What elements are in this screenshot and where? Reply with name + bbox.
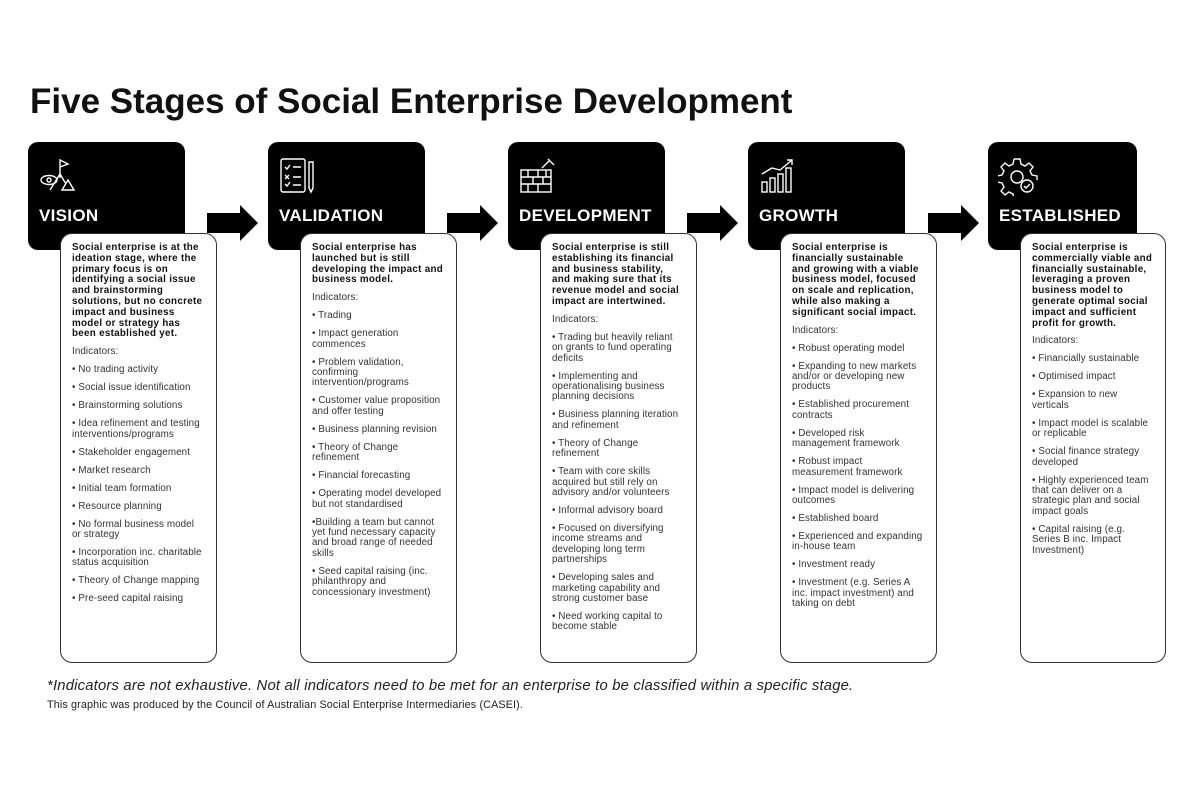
card: validation: • Financial forecasting — [312, 470, 410, 481]
card: validation: • Operating model developed but not standardised — [312, 488, 441, 510]
card: development: • Informal advisory board — [552, 505, 663, 516]
arrow 4 — [928, 205, 979, 241]
card: growth: • Impact model is delivering outcomes — [792, 485, 914, 506]
card: growth: • Experienced and expanding in-house team — [792, 531, 922, 552]
card: development: • Focused on diversifying income streams and developing long term partnerships — [552, 523, 664, 565]
card: validation: Indicators: — [312, 292, 358, 303]
card: development: • Theory of Change refinement — [552, 438, 638, 459]
card: established: • Social finance strategy developed — [1032, 446, 1139, 468]
header: established — [988, 142, 1137, 250]
card: vision: • Brainstorming solutions — [72, 400, 182, 411]
icon: brick wall — [520, 158, 554, 193]
card: vision: • Social issue identification — [72, 382, 191, 393]
card: growth: Social enterprise is financially sustainable and growing with a viable business model, focused on scale and replication, while also making a significant social impact. — [792, 242, 919, 318]
card: validation: • Customer value proposition and offer testing — [312, 395, 440, 417]
icon: eye and flag — [40, 158, 76, 191]
arrow 2 — [447, 205, 498, 241]
header: growth — [748, 142, 905, 250]
card: vision: Social enterprise is at the ideation stage, where the primary focus is on identifying a social issue and brainstorming solutions, but no concrete impact and business model or strategy has been established yet. — [72, 242, 202, 339]
icon: bar chart — [761, 159, 793, 193]
card: validation — [300, 233, 457, 663]
card: established: Social enterprise is commercially viable and financially sustainable, leveraging a proven business model to generate optimal social impact and sufficient profit for growth. — [1032, 242, 1152, 329]
card: vision — [60, 233, 217, 663]
card: validation: Social enterprise has launched but is still developing the impact and business model. — [312, 242, 443, 285]
card: vision: • Stakeholder engagement — [72, 447, 190, 458]
title: Five Stages of Social Enterprise Development — [30, 82, 792, 121]
card: development: • Trading but heavily reliant on grants to fund operating deficits — [552, 332, 673, 364]
card: growth: Indicators: — [792, 325, 838, 336]
card: established: • Capital raising (e.g. Series B inc. Impact Investment) — [1032, 524, 1125, 556]
header: development — [508, 142, 665, 250]
card: validation: • Trading — [312, 310, 352, 321]
arrow 1 — [207, 205, 258, 241]
card: validation: • Business planning revision — [312, 424, 437, 435]
card: development — [540, 233, 697, 663]
card: vision: • Market research — [72, 465, 151, 476]
card: validation: • Theory of Change refinement — [312, 442, 398, 463]
card: validation: • Problem validation, confirming intervention/programs — [312, 357, 409, 388]
card: established: • Highly experienced team that can deliver on a strategic plan and social impact goals — [1032, 475, 1148, 517]
card: validation: •Building a team but cannot yet fund necessary capacity and broad range of needed skills — [312, 517, 436, 559]
card: established: • Financially sustainable — [1032, 353, 1139, 364]
card: vision: Indicators: — [72, 346, 118, 357]
credit: This graphic was produced by the Council of Australian Social Enterprise Intermediaries (CASEI). — [47, 699, 523, 711]
card: development: Indicators: — [552, 314, 598, 325]
card: growth: • Investment ready — [792, 559, 875, 570]
card: established: • Optimised impact — [1032, 371, 1116, 382]
card: established — [1020, 233, 1166, 663]
card: growth: • Established procurement contracts — [792, 399, 909, 421]
card: growth: • Investment (e.g. Series A inc. impact investment) and taking on debt — [792, 577, 914, 609]
card: development: • Need working capital to become stable — [552, 611, 662, 632]
card: validation: • Seed capital raising (inc. philanthropy and concessionary investment) — [312, 566, 430, 598]
card: vision: • No trading activity — [72, 364, 158, 375]
card: growth: • Established board — [792, 513, 878, 524]
card: growth: • Robust operating model — [792, 343, 905, 354]
card: vision: • Pre-seed capital raising — [72, 593, 183, 604]
card: growth — [780, 233, 937, 663]
arrow 3 — [687, 205, 738, 241]
card: vision: • Idea refinement and testing interventions/programs — [72, 418, 200, 440]
header: development: DEVELOPMENT — [519, 206, 652, 225]
card: validation: • Impact generation commences — [312, 328, 398, 350]
footnote: *Indicators are not exhaustive. Not all indicators need to be met for an enterprise to be classified within a specific stage. — [47, 678, 853, 694]
card: growth: • Expanding to new markets and/or or developing new products — [792, 361, 916, 392]
header: vision: VISION — [39, 206, 98, 225]
icon: gear check — [998, 158, 1038, 196]
card: vision: • Initial team formation — [72, 483, 171, 494]
card: established: • Expansion to new verticals — [1032, 389, 1117, 411]
card: growth: • Developed risk management framework — [792, 428, 900, 449]
card: vision: • Resource planning — [72, 501, 162, 512]
header: growth: GROWTH — [759, 206, 838, 225]
icon: checklist — [280, 158, 314, 194]
header: validation: VALIDATION — [279, 206, 383, 225]
header: established: ESTABLISHED — [999, 206, 1121, 225]
card: development: • Implementing and operationalising business planning decisions — [552, 371, 665, 402]
card: development: • Developing sales and marketing capability and strong customer base — [552, 572, 660, 604]
card: development: Social enterprise is still establishing its financial and business stability, and making sure that its revenue model and social impact are intertwined. — [552, 242, 679, 307]
card: established: • Impact model is scalable or replicable — [1032, 418, 1148, 439]
card: established: Indicators: — [1032, 335, 1078, 346]
card: growth: • Robust impact measurement framework — [792, 456, 902, 478]
header: vision — [28, 142, 185, 250]
card: development: • Business planning iteration and refinement — [552, 409, 678, 431]
card: vision: • Theory of Change mapping — [72, 575, 199, 586]
card: vision: • No formal business model or strategy — [72, 519, 194, 540]
card: vision: • Incorporation inc. charitable status acquisition — [72, 547, 202, 568]
header: validation — [268, 142, 425, 250]
card: development: • Team with core skills acquired but still rely on advisory and/or volunteers — [552, 466, 670, 498]
